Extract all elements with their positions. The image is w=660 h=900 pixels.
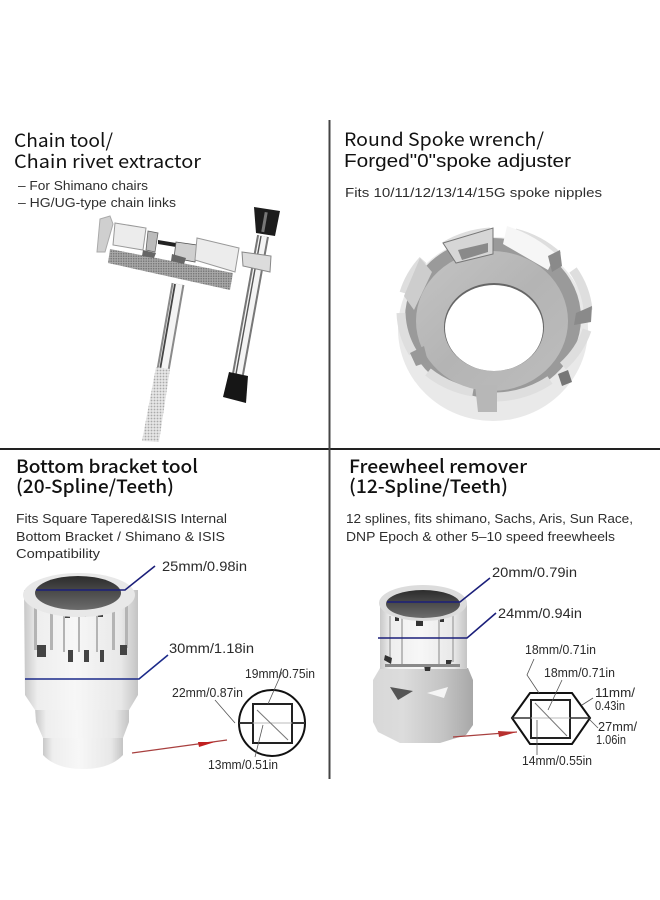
heading: freewheel remover bbox=[349, 453, 527, 499]
diagram: square socket section bbox=[172, 667, 315, 772]
dimension line: 30mm: 30mm/1.18in bbox=[169, 640, 254, 656]
heading: chain tool: Chain tool/ bbox=[14, 127, 113, 153]
text: chain tool features bbox=[18, 178, 177, 210]
panel: bottom bracket tool bbox=[16, 453, 315, 772]
diagram: hexagon socket section: 18mm/0.71in bbox=[525, 643, 596, 657]
arrow: red pointer bbox=[453, 731, 517, 737]
heading: bottom bracket: Bottom bracket tool bbox=[16, 453, 198, 479]
text: chain tool features: – HG/UG-type chain links bbox=[18, 195, 177, 210]
text: freewheel fit bbox=[346, 511, 633, 544]
icon: spoke wrench bbox=[398, 226, 592, 421]
icon: freewheel socket bbox=[373, 585, 473, 743]
panel: round spoke wrench bbox=[344, 126, 603, 421]
diagram: square socket section: 19mm/0.75in bbox=[245, 667, 315, 681]
text: chain tool features: – For Shimano chairs bbox=[18, 178, 149, 193]
text: spoke wrench fit: Fits 10/11/12/13/14/15G spoke nipples bbox=[345, 185, 603, 200]
dimension line: 24mm: 24mm/0.94in bbox=[498, 605, 582, 621]
dimension line: 20mm bbox=[387, 564, 577, 602]
text: bottom bracket fit: Bottom Bracket / Shimano & ISIS bbox=[16, 529, 225, 544]
dividers bbox=[0, 120, 660, 779]
dimension line: 30mm bbox=[25, 640, 254, 679]
dimension line: 25mm bbox=[36, 558, 247, 590]
heading: chain tool bbox=[14, 127, 202, 174]
diagram: square socket section: 13mm/0.51in bbox=[208, 758, 278, 772]
text: freewheel fit: DNP Epoch & other 5–10 speed freewheels bbox=[346, 529, 616, 544]
dimension line: 24mm bbox=[378, 605, 582, 638]
heading: spoke wrench: Forged"0"spoke adjuster bbox=[344, 150, 571, 171]
diagram: hexagon socket section: 18mm/0.71in bbox=[544, 666, 615, 680]
dimension line: 25mm: 25mm/0.98in bbox=[162, 558, 247, 574]
panel: chain tool bbox=[14, 127, 280, 442]
heading: spoke wrench: Round Spoke wrench/ bbox=[344, 126, 544, 152]
dimension line: 20mm: 20mm/0.79in bbox=[492, 564, 577, 580]
diagram: hexagon socket section: 27mm/ bbox=[598, 720, 638, 734]
diagram: square socket section: 22mm/0.87in bbox=[172, 686, 243, 700]
heading: bottom bracket bbox=[16, 453, 198, 499]
diagram: hexagon socket section: 0.43in bbox=[595, 699, 625, 713]
text: bottom bracket fit: Compatibility bbox=[16, 546, 101, 561]
heading: freewheel remover: Freewheel remover bbox=[349, 453, 527, 479]
heading: spoke wrench bbox=[344, 126, 571, 171]
diagram: hexagon socket section: 11mm/ bbox=[595, 686, 636, 700]
heading: bottom bracket: (20-Spline/Teeth) bbox=[16, 473, 174, 499]
panel: freewheel remover bbox=[346, 453, 638, 768]
heading: freewheel remover: (12-Spline/Teeth) bbox=[349, 473, 508, 499]
text: bottom bracket fit: Fits Square Tapered&ISIS Internal bbox=[16, 511, 227, 526]
icon: bottom bracket socket bbox=[23, 573, 138, 769]
text: bottom bracket fit bbox=[16, 511, 227, 561]
text: freewheel fit: 12 splines, fits shimano, Sachs, Aris, Sun Race, bbox=[346, 511, 633, 526]
diagram: hexagon socket section: 1.06in bbox=[596, 733, 626, 747]
diagram: hexagon socket section bbox=[512, 643, 638, 768]
arrow: red pointer bbox=[132, 740, 227, 753]
icon: chain rivet extractor tool bbox=[97, 207, 280, 442]
heading: chain tool: Chain rivet extractor bbox=[14, 148, 202, 174]
diagram: hexagon socket section: 14mm/0.55in bbox=[522, 754, 592, 768]
